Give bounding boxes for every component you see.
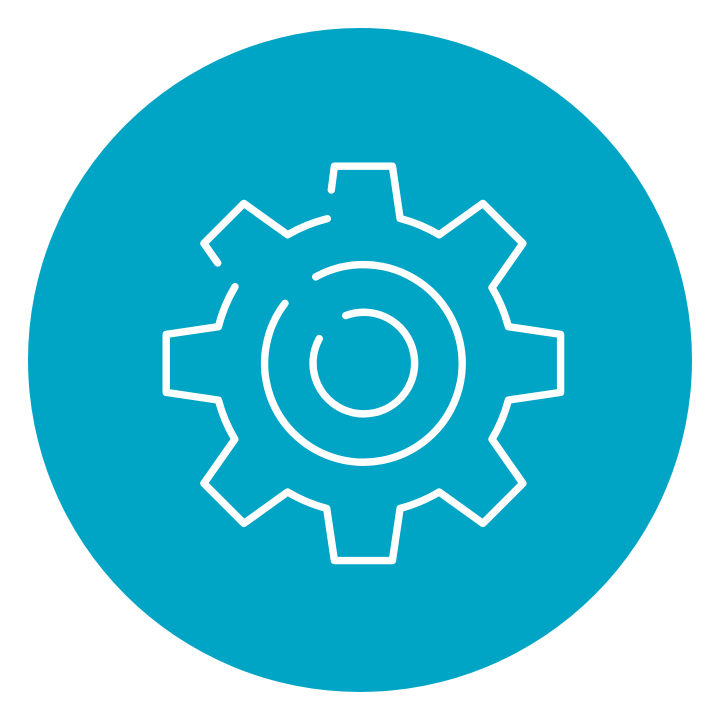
gear outline bbox=[166, 166, 561, 561]
outer ring bbox=[265, 265, 462, 462]
gear outline upper-left fragment bbox=[204, 203, 327, 263]
gear line art bbox=[166, 166, 561, 561]
inner ring bbox=[313, 312, 415, 414]
